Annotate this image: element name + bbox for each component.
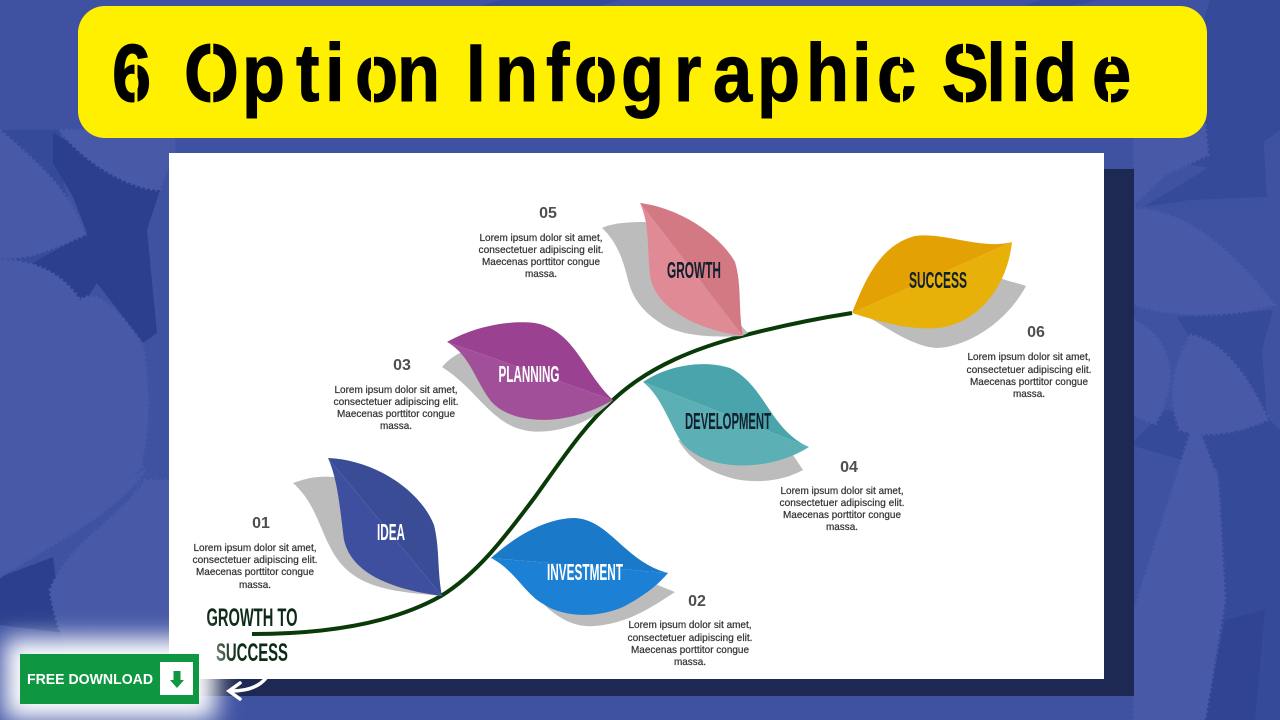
description: Maecenas porttitor congue bbox=[482, 257, 600, 268]
description: Maecenas porttitor congue bbox=[631, 645, 749, 656]
label: SUCCESS bbox=[909, 267, 967, 293]
label: GROWTH bbox=[667, 257, 721, 283]
description: consectetuer adipiscing elit. bbox=[334, 397, 458, 408]
description bbox=[628, 620, 752, 668]
option 04: development bbox=[643, 364, 904, 533]
description: Lorem ipsum dolor sit amet, bbox=[968, 352, 1090, 363]
description: consectetuer adipiscing elit. bbox=[478, 245, 604, 256]
description: Maecenas porttitor congue bbox=[196, 567, 314, 578]
label: INVESTMENT bbox=[547, 559, 623, 585]
description: Lorem ipsum dolor sit amet, bbox=[194, 543, 316, 554]
leaf: success bbox=[852, 235, 1012, 328]
growth stem bbox=[252, 313, 852, 634]
option 06: success bbox=[852, 235, 1092, 400]
description bbox=[478, 233, 604, 280]
leaf: planning bbox=[447, 322, 613, 420]
title text: 6OptionInfographicSlide bbox=[112, 28, 1131, 119]
description: Lorem ipsum dolor sit amet, bbox=[334, 385, 458, 396]
description: consectetuer adipiscing elit. bbox=[780, 498, 904, 509]
number: 04 bbox=[840, 459, 858, 476]
description: Lorem ipsum dolor sit amet, bbox=[628, 620, 752, 631]
number: 03 bbox=[393, 357, 411, 374]
dark offset panel shadow bbox=[200, 169, 1134, 696]
number: 05 bbox=[539, 205, 557, 222]
description: Lorem ipsum dolor sit amet, bbox=[780, 486, 904, 497]
description: massa. bbox=[674, 657, 706, 668]
leaf shadow bbox=[678, 440, 803, 481]
description: massa. bbox=[1013, 389, 1045, 400]
leaf: development bbox=[643, 364, 809, 465]
leaf: investment bbox=[491, 518, 668, 615]
label: IDEA bbox=[377, 519, 405, 545]
description bbox=[966, 352, 1092, 400]
stem caption bbox=[206, 604, 298, 667]
description: Lorem ipsum dolor sit amet, bbox=[480, 233, 602, 244]
number: 02 bbox=[688, 593, 706, 610]
description: Maecenas porttitor congue bbox=[783, 510, 901, 521]
leaf shadow bbox=[442, 352, 613, 432]
stem caption: SUCCESS bbox=[216, 639, 288, 667]
white slide panel bbox=[169, 153, 1104, 679]
title bar bbox=[78, 6, 1207, 138]
number: 06 bbox=[1027, 324, 1045, 341]
stem caption: GROWTH TO bbox=[206, 604, 298, 632]
leaf: idea bbox=[328, 458, 442, 596]
leaf shadow bbox=[537, 582, 675, 626]
leaf shadow bbox=[870, 278, 1026, 348]
option 04: development: DEVELOPMENT bbox=[685, 408, 771, 434]
description: consectetuer adipiscing elit. bbox=[192, 555, 318, 566]
description: massa. bbox=[826, 522, 858, 533]
description bbox=[334, 385, 458, 432]
number: 01 bbox=[252, 515, 270, 532]
leaf shadow bbox=[293, 477, 442, 596]
description: massa. bbox=[525, 269, 557, 280]
description: Maecenas porttitor congue bbox=[337, 409, 455, 420]
option 05: growth bbox=[478, 203, 748, 337]
description bbox=[780, 486, 904, 533]
free download button: FREE DOWNLOAD bbox=[27, 672, 153, 688]
option 01: idea bbox=[192, 458, 442, 596]
option 03: planning bbox=[334, 322, 613, 432]
description: massa. bbox=[239, 580, 271, 591]
icon: curved white arrow bbox=[229, 678, 266, 699]
description: massa. bbox=[380, 421, 412, 432]
description bbox=[192, 543, 318, 591]
description: Maecenas porttitor congue bbox=[970, 377, 1088, 388]
leaf: growth bbox=[640, 203, 743, 336]
description: consectetuer adipiscing elit. bbox=[966, 365, 1092, 376]
free download button bbox=[20, 654, 199, 704]
label: PLANNING bbox=[498, 361, 560, 387]
description: consectetuer adipiscing elit. bbox=[628, 633, 752, 644]
leaf shadow bbox=[602, 222, 748, 337]
icon: download arrow bbox=[170, 671, 184, 688]
option 02: investment bbox=[491, 518, 752, 668]
white glow behind download button bbox=[4, 638, 216, 720]
